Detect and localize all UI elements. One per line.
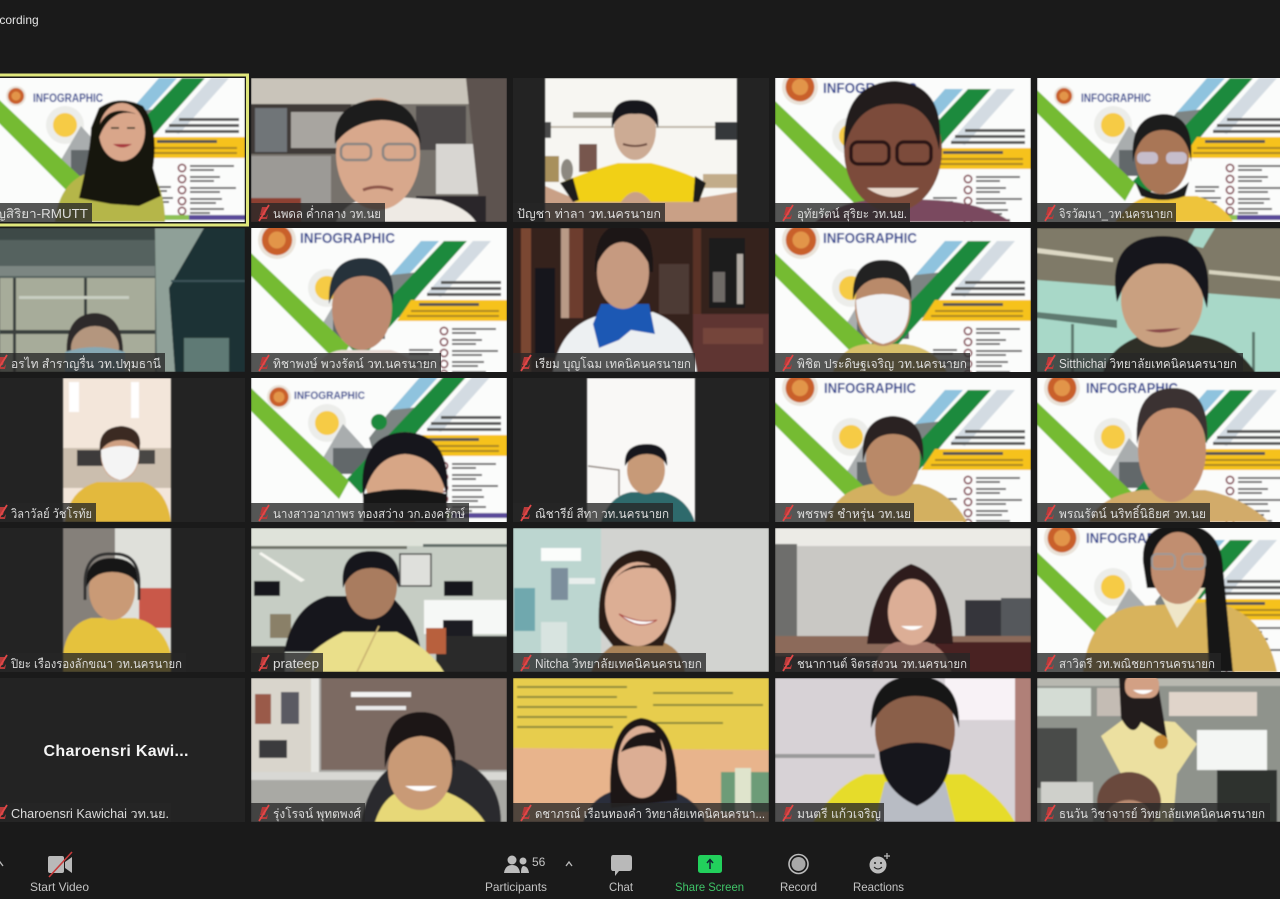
tile: สาวิตรี: INFOGRAPHIC <box>1086 530 1178 547</box>
tile: นางสาวอาภาพร ทองสว่าง: INFOGRAPHIC <box>294 390 365 402</box>
person: woman in yellow with glasses <box>1083 524 1277 672</box>
name label: พิชิต ประดิษฐเจริญ วท.นครนายก <box>797 357 967 371</box>
name label: นางสาวอาภาพร ทองสว่าง วก.องครักษ์ <box>273 507 465 521</box>
name label: ธนวัน วิชาจารย์ วิทยาลัยเทคนิคนครนายก <box>1059 807 1265 821</box>
name label: เรียม บุญโฉม เทคนิคนครนายก <box>535 356 691 372</box>
name label <box>251 803 365 822</box>
name label <box>513 503 673 522</box>
person: woman in yellow <box>825 416 967 522</box>
name label: ชนากานต์ จิตรสงวน วท.นครนายก <box>797 657 967 671</box>
person: man in teal shirt <box>601 444 695 522</box>
person: smiling woman in yellow <box>361 712 501 822</box>
name label <box>251 353 441 372</box>
name label <box>513 203 665 222</box>
tile: จิรวัฒนา: INFOGRAPHIC <box>1081 91 1151 105</box>
person: woman in tan top <box>1089 388 1269 522</box>
person: man in white mask <box>833 260 947 372</box>
tile: ดชาภรณ์ เรือนทองคำ <box>513 678 769 822</box>
name label <box>0 653 186 672</box>
tile: นพดล ค่ำกลาง <box>251 78 507 222</box>
person: woman with white mask and yellow shirt <box>65 426 171 522</box>
name label <box>775 653 970 672</box>
name label: Sitthichai วิทยาลัยเทคนิคนครนายก <box>1059 357 1237 371</box>
name label <box>251 503 469 522</box>
tile: ทิชาพงษ์ พวงรัตน์: INFOGRAPHIC <box>300 230 395 247</box>
tile: ธนวัน วิชาจารย์ <box>1037 678 1280 822</box>
person: man with headset <box>63 554 171 672</box>
person: woman in black mask <box>362 432 448 524</box>
name label <box>775 203 910 222</box>
person: man in black mask and yellow jacket <box>813 676 1015 822</box>
name label <box>0 503 96 522</box>
name label: พรณรัตน์ นริทธิ์นิธิยศ วท.นย <box>1059 504 1206 521</box>
name label: สาวิตรี วท.พณิชยการนครนายก <box>1059 657 1215 671</box>
name label: Nitcha วิทยาลัยเทคนิคนครนายก <box>535 657 702 671</box>
button: record: Record <box>780 880 817 894</box>
name label <box>251 203 385 222</box>
participant display name: Charoensri Kawi... <box>44 743 188 760</box>
active speaker highlight border <box>0 75 248 225</box>
tile: ทิชาพงษ์ พวงรัตน์ <box>251 228 507 372</box>
name label <box>775 503 914 522</box>
tile: พรณรัตน์ นริทธิ์นิธิยศ <box>1037 378 1280 522</box>
button: share screen <box>675 855 744 894</box>
name label: ณิชารีย์ สีทา วท.นครนายก <box>535 507 669 521</box>
name label: อรไท สำราญรื่น วท.ปทุมธานี <box>11 355 161 372</box>
person: woman with dark glasses <box>815 81 1011 222</box>
button: record <box>780 854 817 894</box>
tile: ณิชารีย์ สีทา <box>513 378 769 522</box>
person: presenter woman <box>55 100 165 222</box>
button: chat: Chat <box>609 880 634 894</box>
tile: Sitthichai <box>1037 228 1280 372</box>
person: woman with long dark hair <box>583 718 705 822</box>
button: reactions: Reactions <box>853 880 904 894</box>
button: start video: Start Video <box>30 880 89 894</box>
name label <box>0 203 92 222</box>
button: participants <box>485 855 547 894</box>
tile: ปิยะ เรืองรองลักขณา <box>0 528 245 672</box>
tile: ปุญสิริยา RMUTT <box>0 78 245 222</box>
tile: จิรวัฒนา <box>1037 78 1280 222</box>
button: chat <box>609 855 634 894</box>
name label <box>251 653 323 672</box>
button: participants: 56 <box>532 855 546 869</box>
name label: อุทัยรัตน์ สุริยะ วท.นย. <box>797 207 907 222</box>
tile: พชรพร ชำหรุ่น: INFOGRAPHIC <box>824 380 916 397</box>
tile: ปุญสิริยา RMUTT: INFOGRAPHIC <box>33 91 103 105</box>
toolbar caret left <box>0 862 3 866</box>
person: woman with long hair <box>867 564 953 672</box>
name label <box>1037 653 1221 672</box>
tile: พิชิต ประดิษฐเจริญ <box>775 228 1031 372</box>
name label: รุ่งโรจน์ พุทตพงศ์ <box>273 806 361 822</box>
button: share screen: Share Screen <box>675 880 744 894</box>
tile: วิลาวัลย์ วัชโรทัย <box>0 378 245 522</box>
button: start video <box>30 852 89 894</box>
name label <box>513 653 706 672</box>
tile: เรียม บุญโฉม <box>513 228 769 372</box>
name label: Charoensri Kawichai วท.นย. <box>11 807 169 821</box>
button: reactions <box>853 853 904 894</box>
name label: prateep <box>273 657 319 671</box>
person: man in dark shirt <box>1103 236 1255 372</box>
name label: จิรวัฒนา_วท.นครนายก <box>1059 207 1173 221</box>
name label <box>1037 803 1270 822</box>
name label <box>1037 503 1210 522</box>
name label <box>513 353 695 372</box>
tile: มนตรี แก้วเจริญ <box>775 678 1031 822</box>
tile: Nitcha <box>513 528 769 672</box>
tile: สาวิตรี <box>1037 528 1280 672</box>
person: woman with glasses and mask <box>1115 114 1233 222</box>
tile: พิชิต ประดิษฐเจริญ: INFOGRAPHIC <box>823 230 917 247</box>
name label: พชรพร ชำหรุ่น วท.นย <box>797 507 911 522</box>
tile: ปัญชา ท่าลา <box>513 78 769 222</box>
person: woman in white polo <box>553 224 697 372</box>
tile: พรณรัตน์ นริทธิ์นิธิยศ: INFOGRAPHIC <box>1086 380 1178 397</box>
person: standing woman in pale yellow <box>1101 674 1197 822</box>
name label: นพดล ค่ำกลาง วท.นย <box>273 205 381 221</box>
person: man in black chair <box>284 551 444 672</box>
name label: ทิชาพงษ์ พวงรัตน์ วท.นครนายก <box>273 357 437 371</box>
tile: ชนากานต์ จิตรสงวน <box>775 528 1031 672</box>
name label <box>0 803 171 822</box>
toolbar <box>0 852 904 894</box>
person: man in yellow shirt <box>545 100 737 222</box>
name label <box>513 803 769 822</box>
tile: prateep <box>251 528 507 672</box>
name label: ปัญชา ท่าลา วท.นครนายก <box>517 207 661 221</box>
tile: อุทัยรัตน์ สุริยะ <box>775 78 1031 222</box>
person: man with glasses <box>335 98 476 222</box>
person: seated head in front <box>1097 772 1161 832</box>
person: partially visible woman <box>65 313 125 372</box>
person: man <box>313 258 419 372</box>
tile: พชรพร ชำหรุ่น <box>775 378 1031 522</box>
button: participants: Participants <box>485 880 547 894</box>
tile: นางสาวอาภาพร ทองสว่าง <box>251 378 507 522</box>
name label <box>1037 353 1243 372</box>
name label <box>1037 203 1176 222</box>
tile: Charoensri Kawichai, camera off <box>0 678 245 822</box>
person: smiling woman <box>591 550 685 672</box>
participants caret <box>566 862 572 866</box>
tile: อรไท สำราญรื่น <box>0 228 245 372</box>
name label <box>775 353 970 372</box>
name label: วิลาวัลย์ วัชโรทัย <box>11 506 92 521</box>
tile: อุทัยรัตน์ สุริยะ: INFOGRAPHIC <box>823 80 917 97</box>
name label <box>775 803 884 822</box>
tile: รุ่งโรจน์ พุทตพงศ์ <box>251 678 507 822</box>
name label <box>0 353 165 372</box>
name label: มนตรี แก้วเจริญ <box>797 807 881 821</box>
name label: ปิยะ เรืองรองลักขณา วท.นครนายก <box>11 657 182 671</box>
